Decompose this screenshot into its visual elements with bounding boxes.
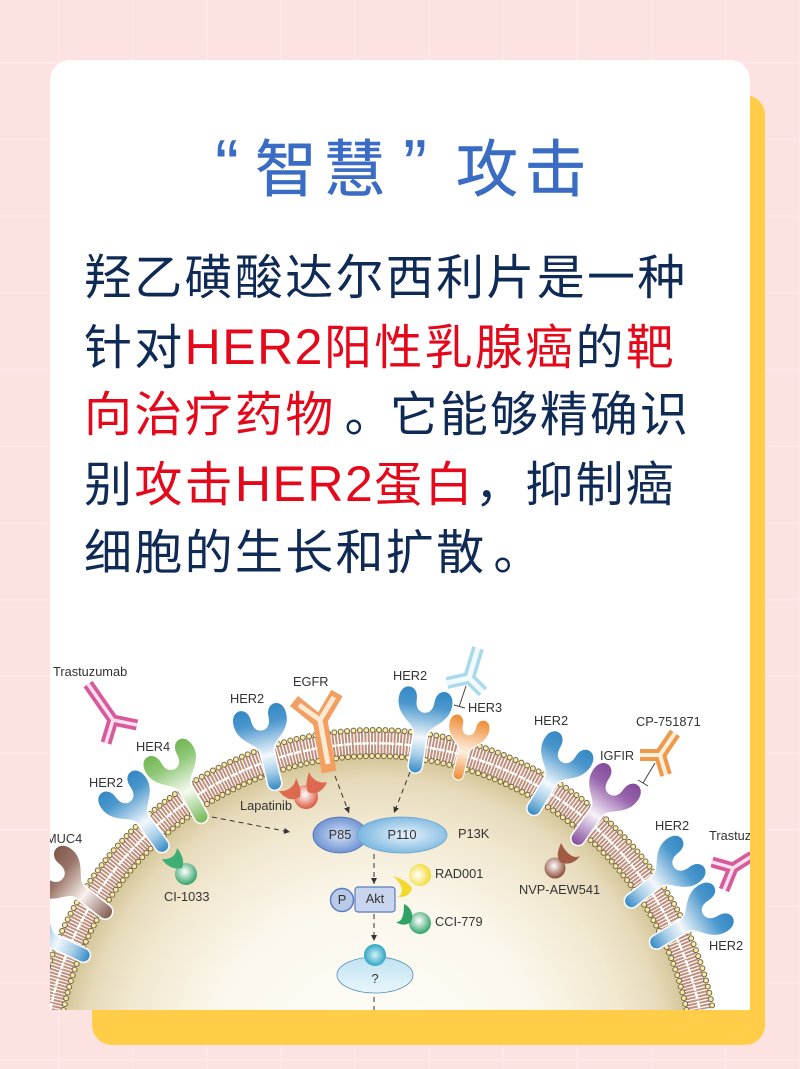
labels: EGFR	[293, 674, 329, 689]
cell cytoplasm	[66, 758, 684, 1010]
node: P	[330, 888, 354, 912]
signalling pathway diagram	[50, 646, 750, 1010]
title: 智慧	[255, 136, 392, 205]
labels: Trastuzumab	[53, 664, 127, 679]
arrow: HER4 to P85	[212, 817, 290, 832]
white card panel	[50, 60, 750, 1010]
node: P110	[357, 817, 447, 853]
dashed line downstream	[374, 997, 375, 1010]
body text: 羟乙磺酸达尔西利片是一种	[84, 252, 688, 305]
labels: HER2	[534, 713, 568, 728]
labels: HER4	[136, 739, 170, 754]
labels: Lapatinib	[240, 798, 292, 813]
title	[215, 126, 593, 206]
labels: HER2	[655, 818, 689, 833]
drug: CI-1033	[162, 848, 197, 885]
labels: HER3	[468, 700, 502, 715]
cell membrane	[37, 730, 713, 1010]
arrow: PI3K to Akt	[373, 854, 375, 884]
drug: Lapatinib	[279, 772, 327, 809]
antibody: Trastuzumab right	[712, 856, 752, 890]
labels: CP-751871	[636, 714, 701, 729]
arrow: Akt to unknown	[373, 914, 375, 941]
labels: HER2	[230, 691, 264, 706]
body text: 向治疗药物。它能够精确识	[84, 389, 690, 442]
title: “	[215, 126, 245, 206]
drug: RAD001	[393, 864, 431, 897]
receptor: MUC4	[50, 846, 114, 920]
receptor: right HER2	[526, 731, 594, 816]
labels: HER2	[709, 938, 743, 953]
arrow: EGFR to P85	[335, 776, 349, 813]
node: Akt	[355, 887, 395, 912]
receptor: centre HER2	[398, 686, 452, 774]
node: Akt: Akt	[366, 891, 385, 906]
labels: NVP-AEW541	[519, 882, 600, 897]
body text: 别攻击HER2蛋白，抑制癌	[84, 456, 676, 512]
labels: RAD001	[435, 866, 483, 881]
receptor: left HER2	[98, 770, 170, 854]
receptor: HER3	[449, 714, 490, 780]
node: P85: P85	[329, 827, 351, 842]
antibody: Trastuzumab left	[88, 684, 137, 743]
drug: CCI-779	[396, 904, 431, 934]
body text: 针对HER2阳性乳腺癌的靶	[84, 319, 676, 375]
node: unknown	[337, 944, 413, 993]
yellow offset card	[92, 95, 765, 1045]
node: unknown: ?	[371, 971, 379, 986]
node: P110: P110	[388, 827, 416, 842]
receptor: EGFR	[294, 693, 337, 772]
node: P: P	[338, 892, 346, 907]
receptor: lower right HER2 lower	[648, 882, 734, 950]
drug: NVP-AEW541	[544, 843, 580, 878]
arrow: HER2 to P110	[394, 772, 410, 813]
labels: P13K	[458, 826, 490, 841]
title: ”	[403, 126, 433, 206]
antibody: CP-751871	[640, 733, 675, 775]
body text	[84, 252, 690, 580]
labels: IGFIR	[600, 748, 634, 763]
labels: CCI-779	[435, 914, 483, 929]
labels: HER2	[89, 775, 123, 790]
inhibition line IGFIR	[638, 763, 655, 786]
receptor: lower left HER2	[50, 924, 92, 964]
labels: HER2	[393, 668, 427, 683]
receptor: lower right HER2 upper	[624, 836, 706, 909]
body text: 细胞的生长和扩散。	[84, 527, 544, 580]
labels	[46, 664, 783, 953]
receptor: HER4	[144, 738, 209, 824]
receptor: IGFIR	[570, 763, 641, 846]
node: P85	[313, 817, 367, 853]
labels: CI-1033	[164, 889, 210, 904]
antibody: pale blue	[447, 648, 483, 692]
inhibition line HER3	[454, 686, 466, 708]
receptor: top HER2	[233, 703, 287, 792]
title: 攻击	[456, 136, 593, 205]
